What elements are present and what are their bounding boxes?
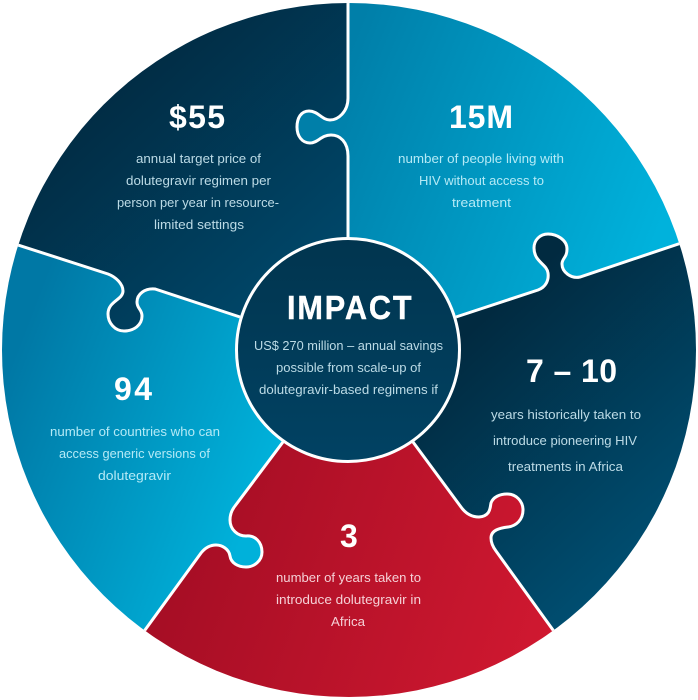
stat: 94: 94 — [114, 371, 152, 407]
stat: $55: $55 — [169, 99, 225, 135]
text: 3 description — [276, 570, 421, 629]
text: 3 description: introduce dolutegravir in — [276, 592, 421, 607]
text: $55 description: limited settings — [154, 217, 245, 232]
text: 94 description: access generic versions of — [59, 446, 210, 461]
panel: top left piece — [18, 3, 348, 330]
text: 94 description: number of countries who can — [50, 424, 220, 439]
text: 7 – 10 description: treatments in Africa — [508, 459, 624, 474]
panel: right piece — [414, 236, 696, 630]
center heading: IMPACT — [287, 289, 412, 326]
center text — [254, 338, 443, 397]
center text: possible from scale-up of — [276, 360, 421, 375]
panel: left piece — [2, 245, 282, 630]
stat: 15M: 15M — [449, 99, 513, 135]
text: 94 description — [50, 424, 220, 483]
text: $55 description: person per year in resource- — [117, 195, 279, 210]
text: 15M description: number of people living with — [398, 151, 564, 166]
center text: US$ 270 million – annual savings — [254, 338, 443, 353]
center circle — [236, 238, 460, 462]
text: 15M description: HIV without access to — [419, 173, 544, 188]
stat: 3: 3 — [340, 518, 358, 554]
panel: bottom red piece — [144, 443, 554, 697]
center text: dolutegravir-based regimens if — [259, 382, 438, 397]
stat: 7 – 10: 7 – 10 — [526, 353, 617, 389]
text: 15M description — [398, 151, 564, 210]
text: $55 description: dolutegravir regimen per — [126, 173, 272, 188]
text: 7 – 10 description — [491, 407, 641, 474]
text: 3 description: Africa — [331, 614, 366, 629]
text: $55 description — [117, 151, 279, 232]
text: $55 description: annual target price of — [136, 151, 261, 166]
text: 15M description: treatment — [452, 195, 511, 210]
text: 7 – 10 description: years historically taken to — [491, 407, 641, 422]
text: 7 – 10 description: introduce pioneering HIV — [493, 433, 637, 448]
panel: top right piece — [298, 3, 680, 317]
text: 3 description: number of years taken to — [276, 570, 421, 585]
text: 94 description: dolutegravir — [98, 468, 172, 483]
